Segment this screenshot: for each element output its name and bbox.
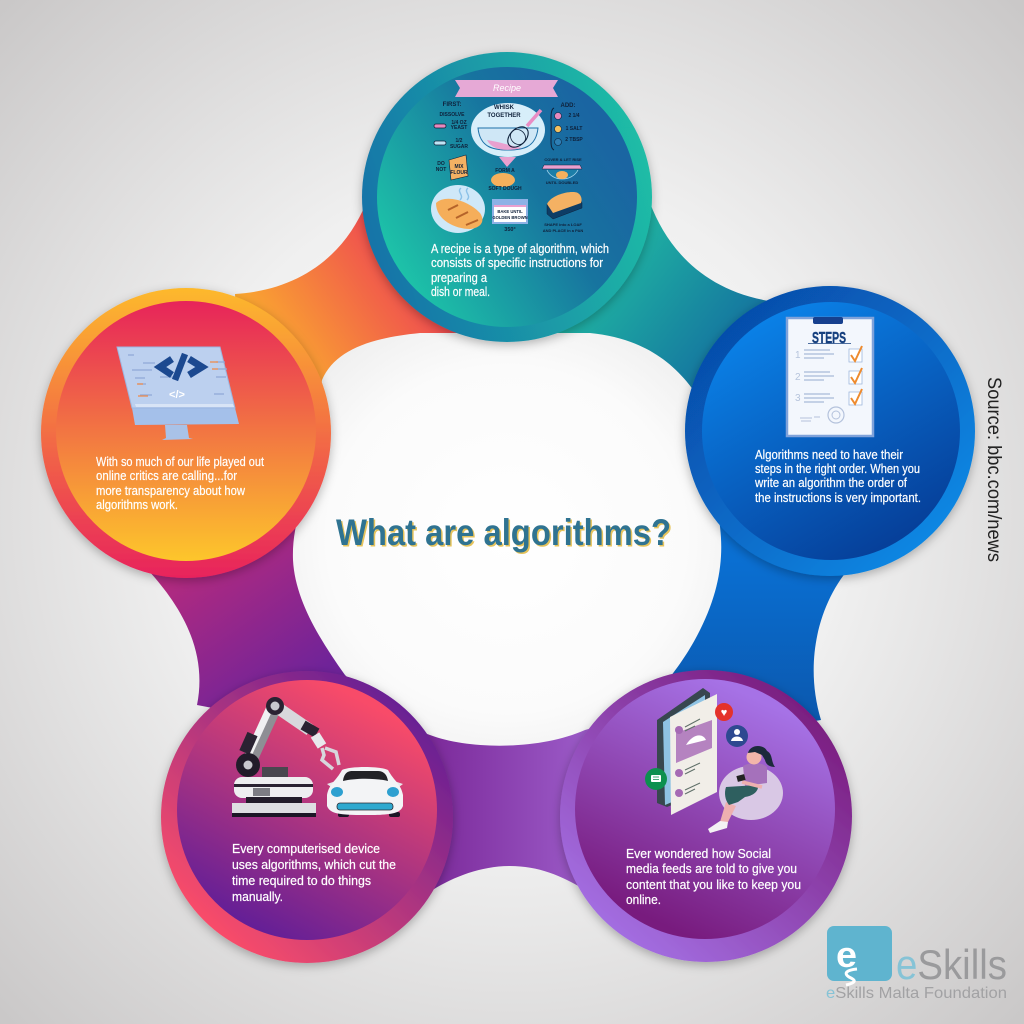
text: social media xyxy=(626,847,801,907)
illustration: recipe: MIX xyxy=(455,164,464,170)
panel: robot xyxy=(161,671,453,963)
text: robot: manually. xyxy=(232,890,283,904)
illustration: recipe: DISSOLVE xyxy=(440,112,465,118)
title: What are algorithms? xyxy=(336,512,671,553)
illustration: recipe: DO xyxy=(437,161,445,167)
illustration: robot arm and car xyxy=(232,697,403,817)
illustration: recipe: SUGAR xyxy=(450,144,468,150)
logo: eSkills: eSkills Malta Foundation xyxy=(826,985,1007,1002)
icon: steps checklist xyxy=(787,317,873,436)
icon: computer monitor: </> xyxy=(169,389,185,401)
illustration: recipe: COVER & LET RISE xyxy=(544,157,582,162)
illustration: social media user xyxy=(645,688,783,833)
text: transparency: online critics are calling...for xyxy=(96,469,237,483)
logo: eSkills xyxy=(826,926,1007,1002)
icon: steps checklist: 2 xyxy=(795,372,801,383)
illustration: recipe: TOGETHER xyxy=(487,113,521,119)
illustration: recipe: WHISK xyxy=(494,105,515,111)
logo: eSkills: e xyxy=(836,934,857,975)
text: social media: Ever wondered how Social xyxy=(626,847,771,861)
illustration: recipe: Recipe xyxy=(493,83,521,93)
band: violet xyxy=(420,700,600,893)
icon: steps checklist: STEPS xyxy=(812,330,846,347)
text: social media: content that you like to keep you xyxy=(626,878,801,892)
title: What are algorithms? xyxy=(338,514,672,554)
text: recipe: consists of specific instructions for xyxy=(431,256,603,270)
illustration: recipe xyxy=(431,80,583,233)
band: blue xyxy=(620,490,852,740)
text: steps: write an algorithm the order of xyxy=(754,476,907,490)
band: orange xyxy=(235,203,500,440)
text: recipe: preparing a xyxy=(431,271,487,285)
panel: transparency xyxy=(41,288,331,578)
panel: steps xyxy=(685,286,975,576)
illustration: recipe: AND PLACE in a PAN xyxy=(543,228,583,233)
text: recipe xyxy=(431,242,609,299)
text: transparency xyxy=(96,455,264,512)
illustration: social media user: ♥ xyxy=(721,707,727,719)
illustration: recipe: 1/2 xyxy=(456,138,463,144)
illustration: recipe: FORM A xyxy=(495,168,515,174)
illustration: recipe: 350° xyxy=(504,227,516,233)
logo: eSkills: eSkills xyxy=(896,941,1007,988)
connecting ring xyxy=(148,203,852,893)
text: transparency: more transparency about how xyxy=(96,484,246,498)
illustration: recipe: SOFT DOUGH xyxy=(488,186,522,192)
band: magenta xyxy=(148,500,380,740)
text: social media: media feeds are told to give you xyxy=(626,862,797,876)
band: teal xyxy=(520,203,775,420)
text: steps: the instructions is very important. xyxy=(755,491,921,505)
text: recipe: A recipe is a type of algorithm, which xyxy=(431,242,609,256)
illustration: recipe: NOT xyxy=(436,167,446,173)
illustration: recipe: ADD: xyxy=(560,103,576,109)
icon: steps checklist: 1 xyxy=(795,350,801,361)
text: steps: Algorithms need to have their xyxy=(755,448,903,462)
text: robot: uses algorithms, which cut the xyxy=(232,858,396,872)
illustration: recipe: YEAST xyxy=(451,125,467,131)
text: steps xyxy=(754,448,921,505)
text: robot: Every computerised device xyxy=(232,842,380,856)
illustration: recipe: FIRST: xyxy=(443,102,461,108)
text: transparency: With so much of our life played out xyxy=(96,455,264,469)
illustration: recipe: FLOUR xyxy=(450,170,468,176)
illustration: recipe: GOLDEN BROWN xyxy=(492,215,528,220)
illustration: recipe: SHAPE into a LOAF xyxy=(544,222,582,227)
panel: recipe xyxy=(362,52,652,342)
illustration: recipe: 2 1/4 xyxy=(568,113,580,119)
panel: social media xyxy=(560,670,852,962)
text: robot xyxy=(232,842,396,904)
illustration: recipe: UNTIL DOUBLED xyxy=(546,180,578,185)
source note: Source: bbc.com/news xyxy=(983,377,1004,562)
text: recipe: dish or meal. xyxy=(431,285,490,299)
text: social media: online. xyxy=(626,893,661,907)
illustration: recipe: BAKE UNTIL xyxy=(497,209,523,214)
text: steps: steps in the right order. When you xyxy=(755,462,920,476)
illustration: recipe: 1 SALT xyxy=(566,126,582,132)
illustration: recipe: 1/4 OZ xyxy=(451,120,467,126)
illustration: recipe: 2 TBSP xyxy=(565,137,583,143)
text: robot: time required to do things xyxy=(232,874,371,888)
icon: computer monitor xyxy=(117,347,239,440)
text: transparency: algorithms work. xyxy=(96,498,178,512)
centre panel xyxy=(293,333,721,746)
icon: steps checklist: 3 xyxy=(795,393,801,404)
